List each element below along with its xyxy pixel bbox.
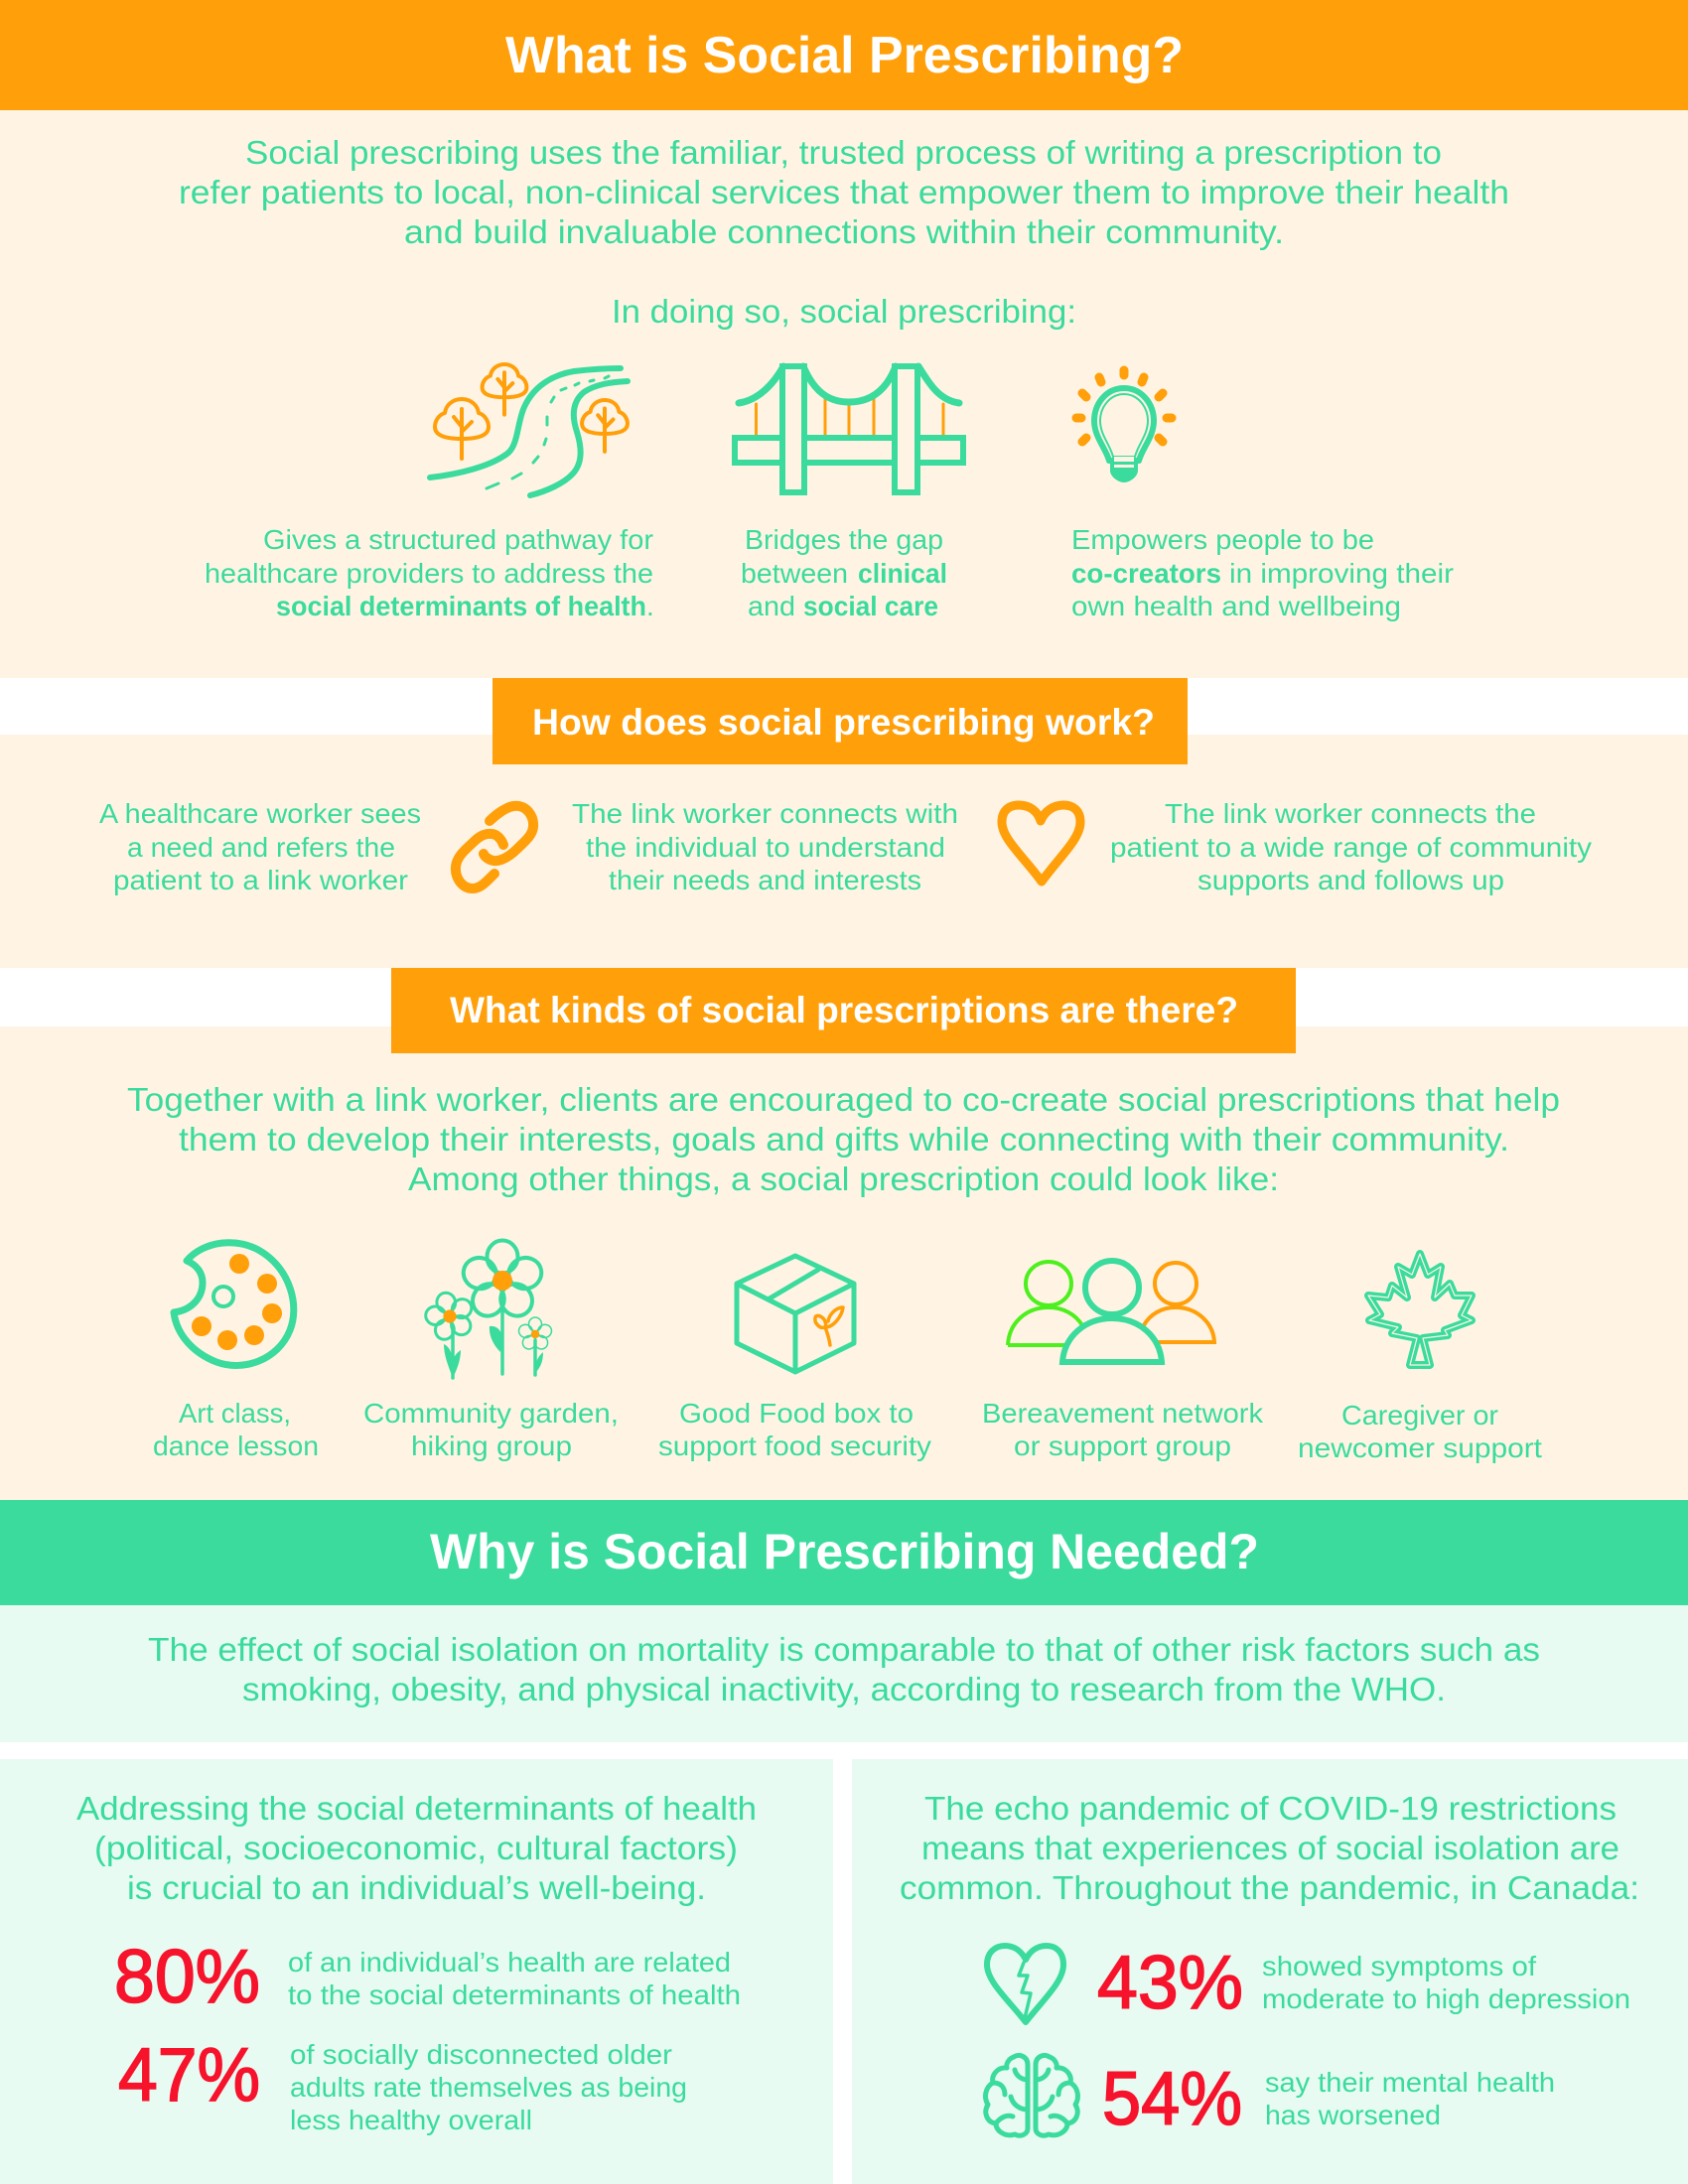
text: step one: A healthcare worker sees [99, 798, 421, 829]
intro text: Among other things, a social prescription could look like: [408, 1160, 1279, 1197]
stat: 54 percent [1102, 2057, 1555, 2141]
icon: three people [1008, 1261, 1214, 1362]
label: community garden: Community garden, [363, 1398, 619, 1429]
stat: 43 percent: 43% [1097, 1941, 1243, 2025]
text: step three [1110, 798, 1592, 895]
text: step three: supports and follows up [1197, 865, 1504, 895]
label: art class: Art class, [179, 1398, 291, 1429]
text: step two: The link worker connects with [572, 798, 958, 829]
stat: 43 percent: moderate to high depression [1262, 1983, 1630, 2014]
text: bridges: and [748, 591, 795, 621]
intro text [179, 134, 1509, 250]
intro text [127, 1081, 1560, 1197]
label: good food box: support food security [658, 1431, 931, 1461]
text: step two: their needs and interests [609, 865, 921, 895]
stat: 43 percent [1097, 1941, 1630, 2025]
text: pathway: healthcare providers to address the [205, 558, 653, 589]
heading: why needed: Why is Social Prescribing Needed? [430, 1524, 1259, 1579]
label: art class: dance lesson [153, 1431, 319, 1461]
stat: 47 percent: less healthy overall [290, 2105, 532, 2135]
text: step two: the individual to understand [586, 832, 945, 863]
text: pathway [205, 524, 654, 621]
icon: paint palette [174, 1243, 294, 1365]
text: step one: patient to a link worker [113, 865, 408, 895]
text: step two [572, 798, 958, 895]
icon: light bulb [1076, 370, 1172, 482]
text: empowers [1071, 524, 1454, 621]
stat: 47 percent [118, 2033, 687, 2135]
text: bridges: social care [803, 591, 938, 621]
intro text: refer patients to local, non-clinical services that empower them to improve their health [179, 174, 1509, 210]
heading: how does it work: How does social prescribing work? [532, 702, 1155, 743]
label: good food box [658, 1398, 931, 1461]
intro text: The effect of social isolation on mortality is comparable to that of other risk factors such as [148, 1631, 1540, 1668]
text: bridges: Bridges the gap [745, 524, 943, 555]
text: empowers: co-creators [1071, 558, 1221, 589]
text: pathway: Gives a structured pathway for [263, 524, 653, 555]
stat: 80 percent: of an individual’s health are related [288, 1947, 731, 1978]
stat: 47 percent: 47% [118, 2033, 260, 2117]
stat: 47 percent: adults rate themselves as being [290, 2072, 687, 2103]
heading: how does it work [492, 678, 1188, 764]
label: caregiver or newcomer: newcomer support [1298, 1433, 1542, 1463]
icon: winding road with trees [430, 364, 628, 495]
panel: how does social prescribing work [0, 678, 1688, 968]
icon: bridge [735, 366, 963, 492]
text: bridges: between [741, 558, 848, 589]
subheading: in doing so: In doing so, social prescribing: [612, 293, 1076, 330]
panel: COVID-19 statistics [852, 1759, 1688, 2184]
text: step one [99, 798, 421, 895]
icon: flowers [425, 1241, 553, 1378]
icon: broken heart [987, 1946, 1063, 2022]
stat: 80 percent: 80% [114, 1935, 260, 2019]
heading: kinds of prescriptions [391, 968, 1296, 1053]
label: community garden: hiking group [411, 1431, 572, 1461]
text: echo pandemic: means that experiences of social isolation are [921, 1830, 1619, 1866]
text: echo pandemic: common. Throughout the pandemic, in Canada: [900, 1869, 1639, 1906]
stat: 80 percent [114, 1935, 741, 2019]
label: art class [153, 1398, 319, 1461]
intro text [148, 1631, 1540, 1707]
icon: heart [1002, 805, 1080, 882]
panel: social determinants statistics [0, 1759, 833, 2184]
text: pathway: . [646, 591, 654, 621]
label: community garden [363, 1398, 619, 1461]
label: good food box: Good Food box to [679, 1398, 914, 1429]
text: empowers: own health and wellbeing [1071, 591, 1401, 621]
intro text: Together with a link worker, clients are encouraged to co-create social prescriptions that help [127, 1081, 1560, 1118]
label: bereavement network: Bereavement network [982, 1398, 1264, 1429]
panel: why is social prescribing needed [0, 1500, 1688, 1742]
icon: brain [986, 2055, 1077, 2135]
panel: kinds of social prescriptions [0, 968, 1688, 1500]
title: What is Social Prescribing: What is Social Prescribing? [505, 27, 1184, 84]
text: step one: a need and refers the [127, 832, 395, 863]
text: addressing determinants [76, 1790, 757, 1906]
icon: food box [737, 1256, 854, 1372]
text: addressing determinants: is crucial to an individual’s well-being. [127, 1869, 706, 1906]
label: bereavement network [982, 1398, 1264, 1461]
text: empowers: Empowers people to be [1071, 524, 1374, 555]
intro text: and build invaluable connections within their community. [404, 213, 1284, 250]
label: bereavement network: or support group [1014, 1431, 1231, 1461]
text: echo pandemic: The echo pandemic of COVID-19 restrictions [924, 1790, 1617, 1827]
stat: 47 percent: of socially disconnected older [290, 2039, 672, 2070]
heading: why needed [0, 1500, 1688, 1605]
icon: chain link [456, 806, 533, 888]
stat: 54 percent: say their mental health [1265, 2067, 1555, 2098]
panel: what is social prescribing [0, 0, 1688, 678]
icon: maple leaf [1368, 1254, 1472, 1365]
text: bridges [741, 524, 947, 621]
intro text: Social prescribing uses the familiar, trusted process of writing a prescription to [245, 134, 1442, 171]
label: caregiver or newcomer [1298, 1400, 1542, 1463]
text: addressing determinants: Addressing the social determinants of health [76, 1790, 757, 1827]
text: bridges: clinical [858, 558, 947, 589]
title: What is Social Prescribing [0, 0, 1688, 110]
label: caregiver or newcomer: Caregiver or [1341, 1400, 1498, 1431]
text: echo pandemic [900, 1790, 1639, 1906]
text: step three: patient to a wide range of community [1110, 832, 1592, 863]
text: step three: The link worker connects the [1165, 798, 1536, 829]
text: addressing determinants: (political, socioeconomic, cultural factors) [94, 1830, 738, 1866]
text: pathway: social determinants of health [276, 591, 646, 621]
intro text: them to develop their interests, goals and gifts while connecting with their community. [179, 1121, 1509, 1158]
intro text: smoking, obesity, and physical inactivity, according to research from the WHO. [242, 1671, 1446, 1707]
stat: 54 percent: 54% [1102, 2057, 1242, 2141]
stat: 80 percent: to the social determinants of health [288, 1979, 741, 2010]
stat: 43 percent: showed symptoms of [1262, 1951, 1536, 1981]
heading: kinds of prescriptions: What kinds of social prescriptions are there? [450, 990, 1238, 1030]
text: empowers: in improving their [1229, 558, 1454, 589]
stat: 54 percent: has worsened [1265, 2100, 1441, 2130]
